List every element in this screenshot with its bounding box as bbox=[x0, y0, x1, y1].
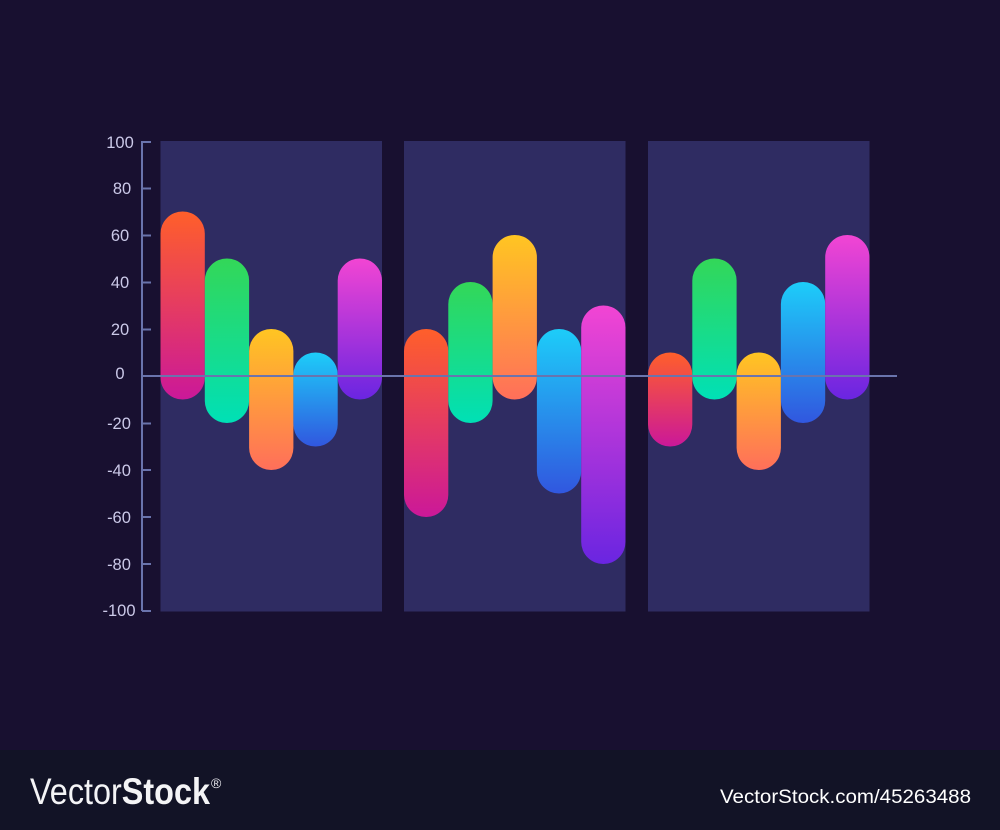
y axis labels: -40 bbox=[107, 462, 131, 480]
y axis labels: -100 bbox=[102, 602, 136, 620]
y axis labels bbox=[102, 134, 136, 620]
panel: group 2 bbox=[404, 141, 626, 612]
zero baseline bbox=[142, 375, 897, 377]
panel: group 1 bbox=[160, 141, 382, 612]
y axis with ticks bbox=[142, 141, 151, 611]
y axis labels: -80 bbox=[107, 556, 131, 574]
footer logo: VectorStock bbox=[30, 771, 210, 812]
bars: group 1 bbox=[160, 212, 382, 470]
y axis labels: 0 bbox=[115, 365, 125, 383]
y axis labels: 40 bbox=[111, 274, 129, 292]
bars: group 2 bbox=[404, 235, 626, 564]
y axis labels: -20 bbox=[107, 415, 131, 433]
footer image id: VectorStock.com/45263488 bbox=[720, 786, 971, 808]
y axis labels: 80 bbox=[113, 180, 131, 198]
panel: group 3 bbox=[648, 141, 870, 612]
bars: group 3 bbox=[648, 235, 870, 470]
footer registered mark: ® bbox=[211, 775, 222, 791]
y axis labels: -60 bbox=[107, 509, 131, 527]
y axis labels: 100 bbox=[106, 134, 134, 152]
y axis labels: 20 bbox=[111, 321, 129, 339]
y axis labels: 60 bbox=[111, 227, 129, 245]
footer bar bbox=[0, 750, 1000, 830]
